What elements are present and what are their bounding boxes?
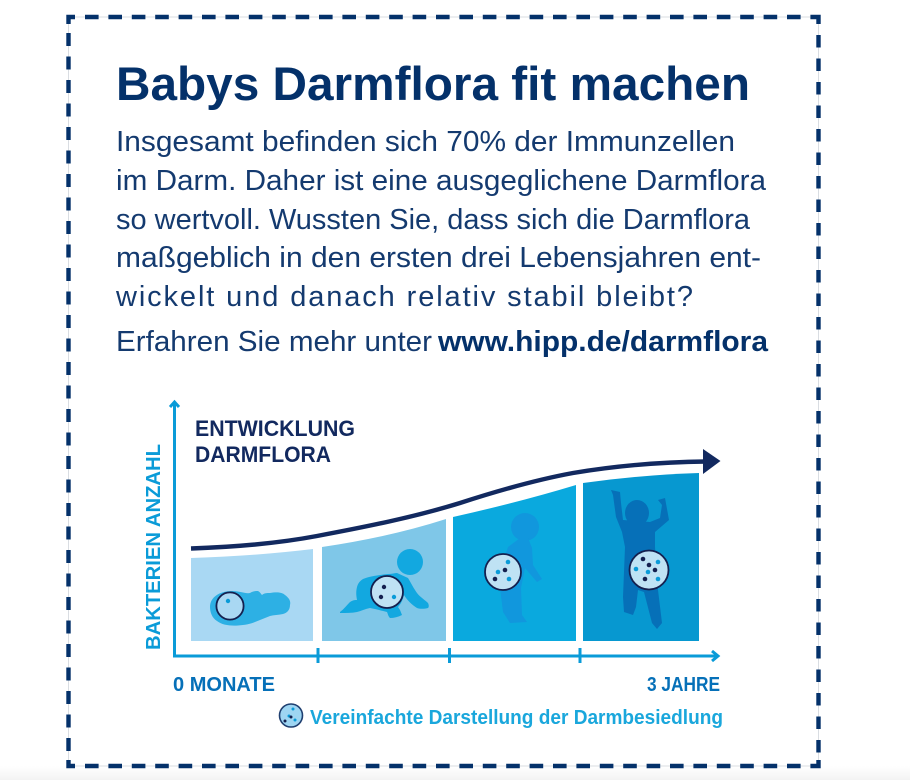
icon: newborn baby xyxy=(210,591,290,626)
axes xyxy=(170,402,718,663)
panel: standing toddler xyxy=(453,485,576,641)
panel: jumping child xyxy=(583,473,699,641)
intro text block xyxy=(115,126,767,313)
intro text block: maßgeblich in den ersten drei Lebensjahren ent- xyxy=(116,242,761,274)
title: Babys Darmflora fit machen xyxy=(116,57,750,110)
y axis label: BAKTERIEN ANZAHL xyxy=(143,444,165,650)
arrow: growth curve xyxy=(191,449,720,548)
icon: legend circle xyxy=(280,704,302,727)
intro text block: Insgesamt befinden sich 70% der Immunzellen xyxy=(116,126,735,158)
icon: standing toddler xyxy=(485,513,542,623)
intro text block: im Darm. Daher ist eine ausgeglichene Darmflora xyxy=(116,165,767,197)
link line: www.hipp.de/darmflora xyxy=(437,326,769,358)
icon: crawling baby xyxy=(340,549,429,618)
dashed coupon border xyxy=(68,17,818,766)
x axis end label: 3 JAHRE xyxy=(647,674,720,696)
chart: gut flora development xyxy=(143,402,723,729)
chart heading xyxy=(195,416,355,467)
icon: jumping child xyxy=(611,490,669,629)
chart heading: ENTWICKLUNG xyxy=(195,416,355,441)
x axis start label: 0 MONATE xyxy=(173,674,275,696)
link line: Erfahren Sie mehr unter xyxy=(116,326,432,358)
legend: Vereinfachte Darstellung der Darmbesiedlung xyxy=(310,707,723,729)
panel: newborn xyxy=(191,549,313,641)
link line xyxy=(116,326,769,358)
intro text block: so wertvoll. Wussten Sie, dass sich die Darmflora xyxy=(116,204,751,236)
chart heading: DARMFLORA xyxy=(195,442,331,467)
intro text block: wickelt und danach relativ stabil bleibt? xyxy=(115,281,693,313)
panel: crawling baby xyxy=(322,519,446,641)
